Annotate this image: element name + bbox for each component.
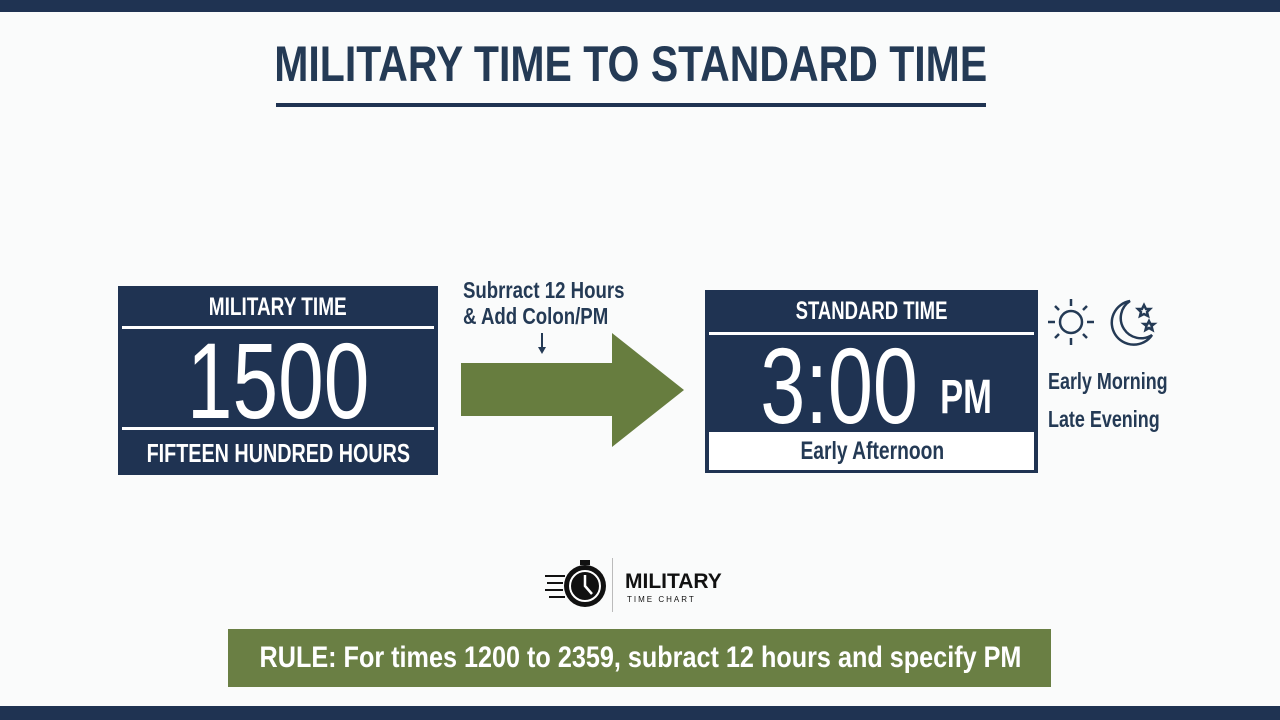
heading: standard time: STANDARD TIME [796, 297, 948, 325]
panel: military time [118, 286, 438, 475]
PM: PM [940, 371, 992, 424]
icon: moon [1110, 300, 1158, 346]
icon: sun [1048, 299, 1094, 345]
text: RULE: For times 1200 to 2359, subract 12 hours and specify PM [259, 641, 1021, 674]
bottom bar [0, 706, 1280, 720]
text: early morning / late evening [1048, 368, 1168, 432]
logo [545, 558, 722, 612]
logo: TIME CHART [627, 595, 696, 604]
title underline [276, 103, 986, 107]
arrow label: & Add Colon/PM [463, 303, 608, 329]
panel: standard time [705, 290, 1038, 473]
icon: stopwatch [545, 560, 606, 607]
panel: standard time: Early Afternoon [800, 437, 944, 465]
text: early morning / late evening: Early Morning [1048, 368, 1168, 394]
caption: FIFTEEN HUNDRED HOURS [146, 438, 410, 468]
digits 1500: 1500 [187, 320, 369, 441]
caption box [709, 432, 1034, 470]
arrow label: Subrract 12 Hours [463, 277, 625, 303]
digits 3:00: 3:00 [760, 325, 918, 446]
logo text: MILITARY [625, 570, 722, 593]
arrow: conversion [461, 333, 684, 447]
small down arrow [538, 333, 546, 354]
heading: military time: MILITARY TIME [209, 293, 347, 321]
arrow label [463, 277, 625, 329]
top bar [0, 0, 1280, 12]
text: early morning / late evening: Late Evening [1048, 406, 1160, 432]
rule banner [228, 629, 1051, 687]
title: MILITARY TIME TO STANDARD TIME [275, 36, 987, 92]
